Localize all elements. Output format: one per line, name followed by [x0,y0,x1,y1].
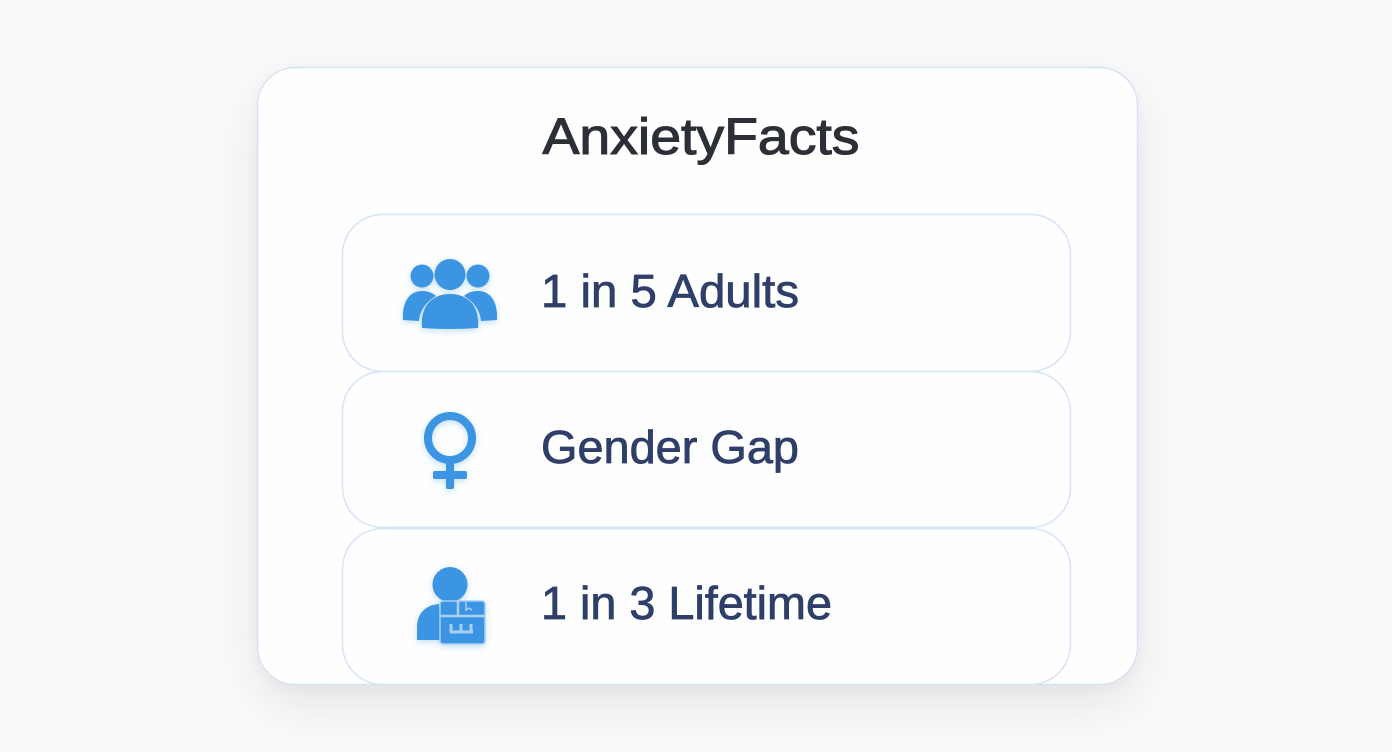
icon: group of people [403,259,497,329]
label: 1 in 5 adults: 1 in 5 Adults [541,265,799,317]
row: 1 in 3 lifetime [342,528,1070,684]
icon: person with box [417,567,485,644]
label: 1 in 3 lifetime: 1 in 3 Lifetime [541,577,832,629]
row: 1 in 5 adults [342,214,1070,372]
row: gender gap [342,372,1070,528]
label: gender gap: Gender Gap [541,421,799,473]
icon: female symbol [428,416,472,489]
panel: anxiety facts card [258,68,1138,684]
title: AnxietyFacts [542,108,860,165]
